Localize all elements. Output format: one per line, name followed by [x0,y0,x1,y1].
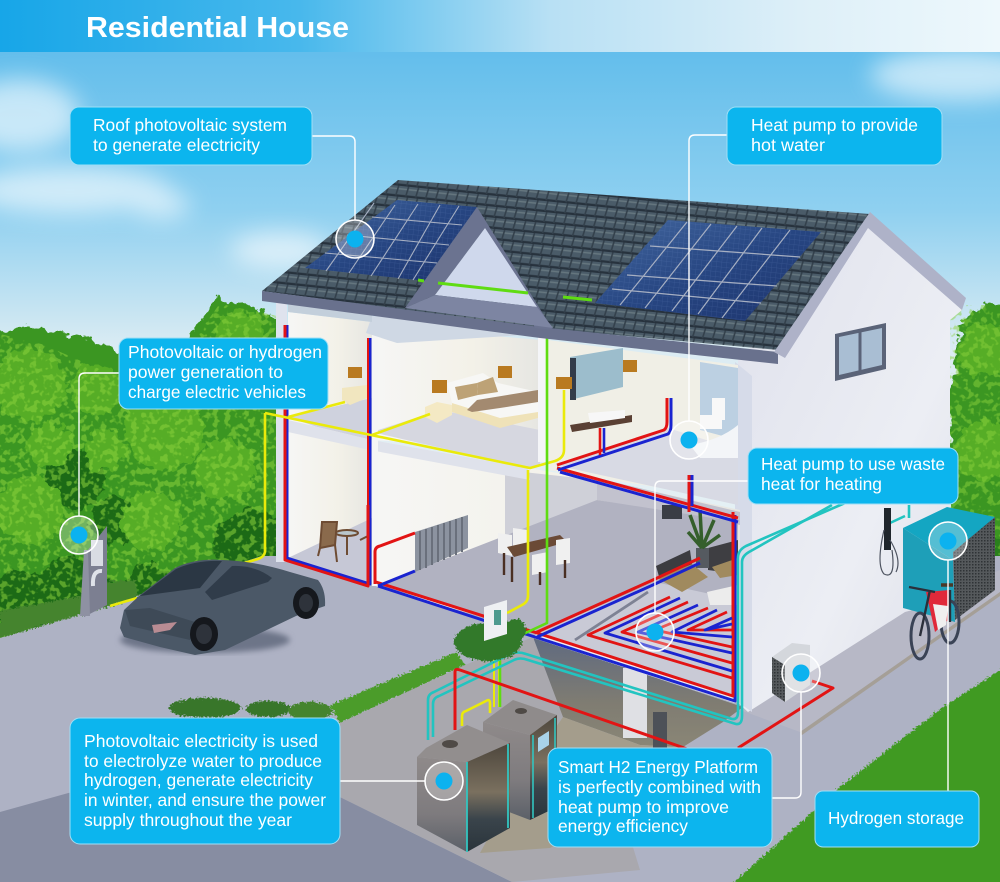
bathroom [548,340,738,500]
roof [262,180,966,364]
H2 unit back [483,700,557,820]
outdoor air-conditioning unit [772,643,810,702]
marker: hydrogen storage [929,522,967,560]
ground [0,556,1000,882]
sofa [656,540,738,605]
header bar [0,0,1000,52]
callout: photovoltaic to hydrogen: to electrolyze water to produce [84,751,322,771]
pillars [276,300,287,562]
solar panel right [595,220,821,321]
callout: photovoltaic to hydrogen: supply throughout the year [84,810,292,830]
furniture [318,348,738,605]
teal lines [428,503,909,740]
marker: outdoor heat pump [782,654,820,692]
room upper middle [372,325,540,450]
house side wall [735,226,962,712]
grass strip [169,652,465,723]
room upper left [288,312,372,440]
callout: waste heat [748,448,958,504]
bed [425,366,538,428]
callout: roof photovoltaic [70,107,312,165]
plant [688,510,720,568]
room lower right [372,440,740,640]
hedge along driveway [0,580,138,638]
callout: photovoltaic to hydrogen: hydrogen, generate electricity [84,770,313,790]
callout: EV charging: power generation to [128,362,283,382]
callout: EV charging: charge electric vehicles [128,382,306,402]
callout: smart H2 platform [548,748,772,847]
red pipe to outdoor unit [455,669,833,750]
pipes [110,325,909,750]
cafe chairs [318,522,368,562]
callout: hydrogen storage: Hydrogen storage [828,808,964,828]
callout: heat pump hot water: Heat pump to provide [751,115,918,135]
dormer [405,207,553,330]
floor slab lower left [288,420,530,480]
callout: smart H2 platform: is perfectly combined with [558,777,761,797]
callout: smart H2 platform: energy efficiency [558,816,688,836]
marker: EV charger [60,516,98,554]
side gable trim [774,212,966,358]
callout: smart H2 platform: heat pump to improve [558,797,729,817]
callout: EV charging [119,338,328,409]
callout: roof photovoltaic: Roof photovoltaic system [93,115,287,135]
room lower left [288,420,372,585]
EV charger [80,526,107,617]
left room nightstand [342,367,367,405]
title: Residential House [86,12,349,44]
marker: floor heating [636,613,674,651]
rooms cutaway [276,300,740,703]
callout: waste heat: Heat pump to use waste [761,454,945,474]
callout: photovoltaic to hydrogen: in winter, and ensure the power [84,790,326,810]
car [120,560,325,655]
marker: roof photovoltaic [336,220,374,258]
callout: heat pump hot water: hot water [751,135,825,155]
callout: EV charging: Photovoltaic or hydrogen [128,342,322,362]
callout: roof photovoltaic: to generate electricity [93,135,260,155]
smart meter [484,600,507,641]
wall charger [880,508,898,575]
right trees [948,300,1000,660]
floor heating coil [575,592,732,678]
marker: smart H2 unit [425,762,463,800]
meter bush [454,619,526,661]
dining table [498,528,570,585]
solar panel left [305,200,477,281]
kitchen oven [662,505,682,519]
hydrogen storage unit [903,507,995,622]
yellow power lines [110,390,564,726]
basement pit [340,637,743,882]
lawn right [725,670,1000,882]
green lines [500,338,547,707]
bicycle [909,585,959,659]
bathroom fittings [556,348,738,458]
callout: heat pump hot water [727,107,942,165]
callout: photovoltaic to hydrogen [70,718,340,844]
callout: waste heat: heat for heating [761,474,882,494]
callout: hydrogen storage [815,791,979,847]
marker: heat pump hot water [670,421,708,459]
radiator [415,515,468,572]
green roof line [563,297,592,300]
leader lines [79,135,948,798]
callout: smart H2 platform: Smart H2 Energy Platform [558,757,758,777]
callout: photovoltaic to hydrogen: Photovoltaic electricity is used [84,731,318,751]
H2 unit front [417,725,510,852]
window [835,323,886,381]
water tank [623,668,667,748]
sky background [0,0,1000,700]
red and blue heating pipes [285,325,738,701]
left trees [0,300,286,660]
